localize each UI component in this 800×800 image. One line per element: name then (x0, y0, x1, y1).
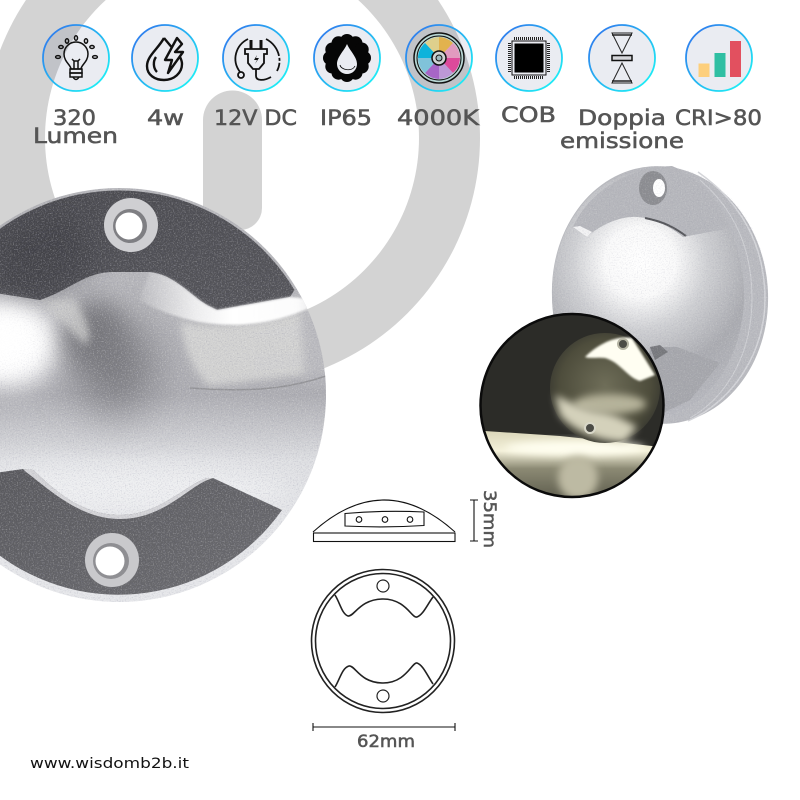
dimension: width 62mm (313, 723, 455, 751)
bottom mounting hole (85, 533, 139, 587)
label: COB: COB (501, 103, 556, 127)
left highlight (0, 310, 38, 370)
small mounting hole (639, 171, 667, 205)
dimension: width 62mm: 62mm (357, 732, 415, 751)
inset: lamp lit in the dark (470, 314, 670, 500)
label: Doppia emissione: emissione (560, 129, 684, 153)
label: 4000K: 4000K (397, 106, 480, 130)
white band of background seen through the photo (139, 272, 325, 325)
recess texture and surface grain (0, 0, 340, 620)
small top recess (573, 166, 730, 237)
small bottom recess (640, 347, 720, 412)
inset hole bottom (585, 423, 595, 433)
label: CRI>80: CRI>80 (675, 106, 762, 130)
technical drawing: top view (312, 570, 454, 712)
label: IP65: IP65 (320, 106, 372, 130)
icon: COB chip (496, 25, 562, 91)
label: Doppia emissione: Doppia (578, 106, 666, 130)
lower beam (555, 395, 637, 442)
icon: double emission triangles (589, 25, 655, 91)
top mounting hole (104, 198, 158, 252)
dimension: height 35mm: 35mm (480, 490, 499, 548)
upper beam (585, 337, 655, 381)
website address: www.wisdomb2b.it (30, 756, 189, 772)
inset hole top (618, 339, 628, 349)
technical drawing: side view (313, 500, 455, 542)
icon: power drop, 4w (132, 25, 198, 91)
floor light (486, 431, 653, 496)
small product photo (552, 166, 768, 424)
label: 4w: 4w (147, 106, 184, 130)
small product grain (552, 166, 768, 423)
top dark recess (0, 190, 294, 310)
label: 12V DC: 12V DC (214, 106, 297, 130)
icon: colour wheel, 4000K (406, 25, 472, 91)
icon: bar chart, CRI (686, 25, 752, 91)
label: 320 Lumen: Lumen (33, 124, 118, 148)
large product photo (0, 188, 326, 602)
dimension: height 35mm (470, 490, 499, 548)
icon: water drop, IP65 (314, 25, 380, 91)
label: Doppia emissione (560, 106, 684, 153)
label: 320 Lumen (33, 106, 118, 148)
bottom dark recess (0, 469, 282, 595)
lit lamp disc (550, 333, 660, 443)
label: 320 Lumen: 320 (53, 106, 96, 130)
icon: plug, 12V DC (223, 25, 289, 91)
icon: bulb, 320 lumen (43, 25, 109, 91)
background power symbol (0, 0, 480, 386)
